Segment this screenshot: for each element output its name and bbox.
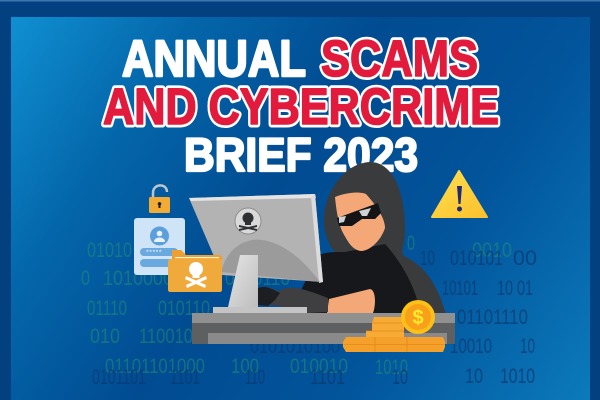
lock body bbox=[149, 197, 170, 213]
binary code dark: 1101 bbox=[170, 366, 200, 389]
binary code green: 010010 bbox=[290, 355, 348, 378]
stand bbox=[228, 255, 258, 307]
desk bbox=[192, 313, 455, 344]
title word: scams fill: SCAMS bbox=[321, 30, 478, 87]
binary code green: 010 bbox=[90, 325, 120, 348]
face bbox=[335, 193, 385, 251]
binary code dark: 0101101 bbox=[92, 366, 146, 389]
title line: and cybercrime: AND CYBERCRIME bbox=[103, 78, 499, 135]
binary code dark: 110 bbox=[245, 366, 265, 389]
monitor arch bbox=[221, 240, 320, 282]
title line: and cybercrime fill: AND CYBERCRIME bbox=[103, 78, 499, 135]
binary code green: 0110110 bbox=[225, 267, 290, 290]
binary code dark: 1101 bbox=[310, 366, 345, 389]
bottom coin row bbox=[343, 337, 445, 352]
binary code dark: 10 bbox=[465, 365, 483, 388]
binary code dark: 10 01 bbox=[497, 277, 533, 300]
shackle bbox=[153, 185, 167, 197]
monitor bbox=[189, 194, 323, 313]
avatar head bbox=[157, 231, 162, 236]
coins bbox=[343, 300, 445, 352]
title word: annual: ANNUAL bbox=[122, 30, 306, 87]
desk top bbox=[192, 313, 455, 323]
username field bbox=[140, 248, 178, 256]
title line: brief 2023: BRIEF 2023 bbox=[184, 128, 418, 181]
password field bbox=[140, 259, 178, 267]
avatar shoulders bbox=[154, 238, 165, 242]
eye left bbox=[339, 216, 346, 223]
binary code green: 0 bbox=[81, 267, 90, 290]
title word: scams: SCAMS bbox=[321, 30, 478, 87]
binary code green: 100 bbox=[231, 355, 259, 378]
monitor right edge bbox=[311, 194, 323, 283]
binary code dark bbox=[92, 247, 537, 389]
binary code dark: 10 bbox=[392, 366, 408, 389]
skull badge bbox=[235, 208, 261, 234]
arm bbox=[327, 289, 375, 313]
dollar sign: $ bbox=[412, 307, 424, 329]
card background bbox=[134, 218, 185, 275]
big coin inner bbox=[405, 304, 431, 330]
binary code dark: 00 bbox=[513, 247, 537, 270]
top edge strip bbox=[0, 0, 600, 2]
binary code dark: 10 bbox=[520, 335, 535, 358]
binary code dark: 10 bbox=[420, 247, 435, 270]
binary code dark: 0101010100 bbox=[250, 335, 340, 358]
folder icon bbox=[168, 250, 222, 292]
monitor top edge bbox=[189, 194, 316, 201]
big coin bbox=[401, 300, 435, 334]
exclamation dot bbox=[457, 206, 462, 212]
avatar bbox=[150, 226, 169, 246]
folder highlight bbox=[175, 257, 219, 258]
folder front bbox=[168, 259, 222, 292]
binary code dark: 010101 bbox=[450, 247, 503, 270]
binary code green bbox=[81, 232, 512, 379]
username dots: ***** bbox=[146, 250, 162, 256]
hood bbox=[324, 162, 446, 320]
dark fingers bbox=[258, 287, 280, 306]
desk front bbox=[192, 323, 455, 344]
skull icon bbox=[239, 212, 257, 231]
folder tab bbox=[172, 250, 222, 270]
middle coin stack bbox=[366, 317, 404, 337]
skull and crossbones bbox=[185, 262, 207, 288]
body bbox=[300, 244, 420, 313]
warning triangle bbox=[432, 171, 487, 217]
keyhole bbox=[158, 202, 161, 208]
binary code green: 01101101000 bbox=[105, 355, 205, 378]
binary code dark: 10010 bbox=[450, 335, 492, 358]
warning sign bbox=[432, 171, 487, 217]
login card bbox=[134, 218, 185, 275]
binary code green: 0010 bbox=[472, 239, 512, 262]
binary code green: 1010 bbox=[375, 356, 408, 379]
mask bbox=[337, 203, 381, 226]
coin row lines bbox=[344, 337, 445, 352]
exclamation mark bbox=[457, 186, 462, 204]
monitor back bbox=[189, 194, 323, 282]
hacker figure bbox=[258, 162, 446, 320]
desk lower strip bbox=[208, 333, 447, 344]
stand base bbox=[213, 307, 307, 313]
title bbox=[103, 30, 499, 181]
binary code green: 010110 bbox=[158, 297, 210, 320]
padlock icon bbox=[149, 185, 170, 213]
binary code dark: 1010 bbox=[500, 365, 535, 388]
eye right bbox=[359, 208, 371, 216]
binary code green: 01010 bbox=[87, 239, 132, 262]
binary code dark: 10101 bbox=[442, 277, 478, 300]
binary code dark: 01101110 bbox=[457, 306, 528, 329]
middle coin stack lines bbox=[366, 323, 404, 331]
binary code green: 110010 bbox=[139, 325, 193, 348]
glove bbox=[258, 287, 328, 313]
binary code green: 1010000 bbox=[103, 267, 173, 290]
binary code green: 01110 bbox=[87, 297, 127, 320]
binary code green: 0 bbox=[407, 232, 415, 255]
